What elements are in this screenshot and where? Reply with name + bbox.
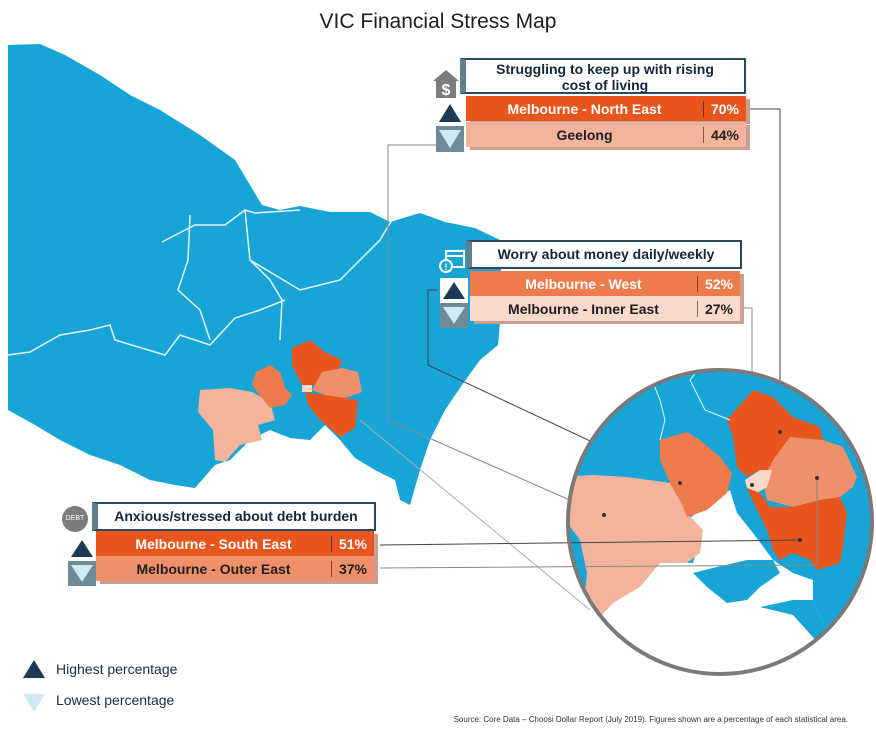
triangles (68, 540, 96, 586)
legend: lowest (23, 692, 174, 712)
header: Worry about money daily/weekly (498, 246, 714, 262)
row: lowest: 37% (339, 560, 367, 576)
icon: calendar: ! (444, 262, 448, 272)
callout: cost of living (433, 58, 750, 152)
legend (23, 660, 177, 712)
map: shaded regions (198, 388, 275, 462)
triangles (440, 278, 468, 328)
row: highest: Melbourne - South East (135, 536, 292, 552)
icon: calendar (439, 250, 465, 273)
source note: Source: Core Data – Choosi Dollar Report (July 2019). Figures shown are a percentage of each statistical area. (454, 715, 848, 724)
row: highest (470, 271, 740, 296)
header (460, 58, 746, 94)
row: highest: Melbourne - North East (507, 100, 662, 116)
icon: bomb (62, 506, 88, 532)
icon: bomb: DEBT (66, 515, 84, 522)
row: highest: 52% (705, 276, 733, 292)
row: highest (96, 531, 374, 556)
row: lowest: Geelong (556, 126, 612, 142)
row: lowest: 27% (705, 300, 733, 316)
callout: debt (62, 502, 378, 586)
title: VIC Financial Stress Map (320, 10, 556, 33)
row: highest (466, 96, 746, 121)
header (466, 240, 742, 269)
legend: highest (23, 660, 177, 678)
header: Anxious/stressed about debt burden (114, 508, 358, 524)
callout: worry daily (439, 240, 744, 328)
row: highest: Melbourne - West (525, 276, 642, 292)
row: lowest: Melbourne - Outer East (136, 560, 291, 576)
row: lowest: Melbourne - Inner East (508, 300, 659, 316)
row: lowest (466, 122, 746, 147)
zoom circle (380, 360, 876, 690)
triangles (436, 104, 464, 152)
legend: highest: Highest percentage (56, 661, 177, 677)
header: Struggling to keep up with rising (496, 61, 714, 77)
connector lines (360, 109, 780, 610)
row: highest: 70% (711, 100, 739, 116)
row: lowest (470, 296, 740, 321)
row: highest: 51% (339, 536, 367, 552)
row: lowest (96, 556, 374, 581)
header (92, 502, 376, 531)
row: lowest: 44% (711, 126, 739, 142)
header: cost of living (562, 77, 648, 93)
icon: house dollar (433, 70, 459, 98)
legend: lowest: Lowest percentage (56, 692, 174, 708)
